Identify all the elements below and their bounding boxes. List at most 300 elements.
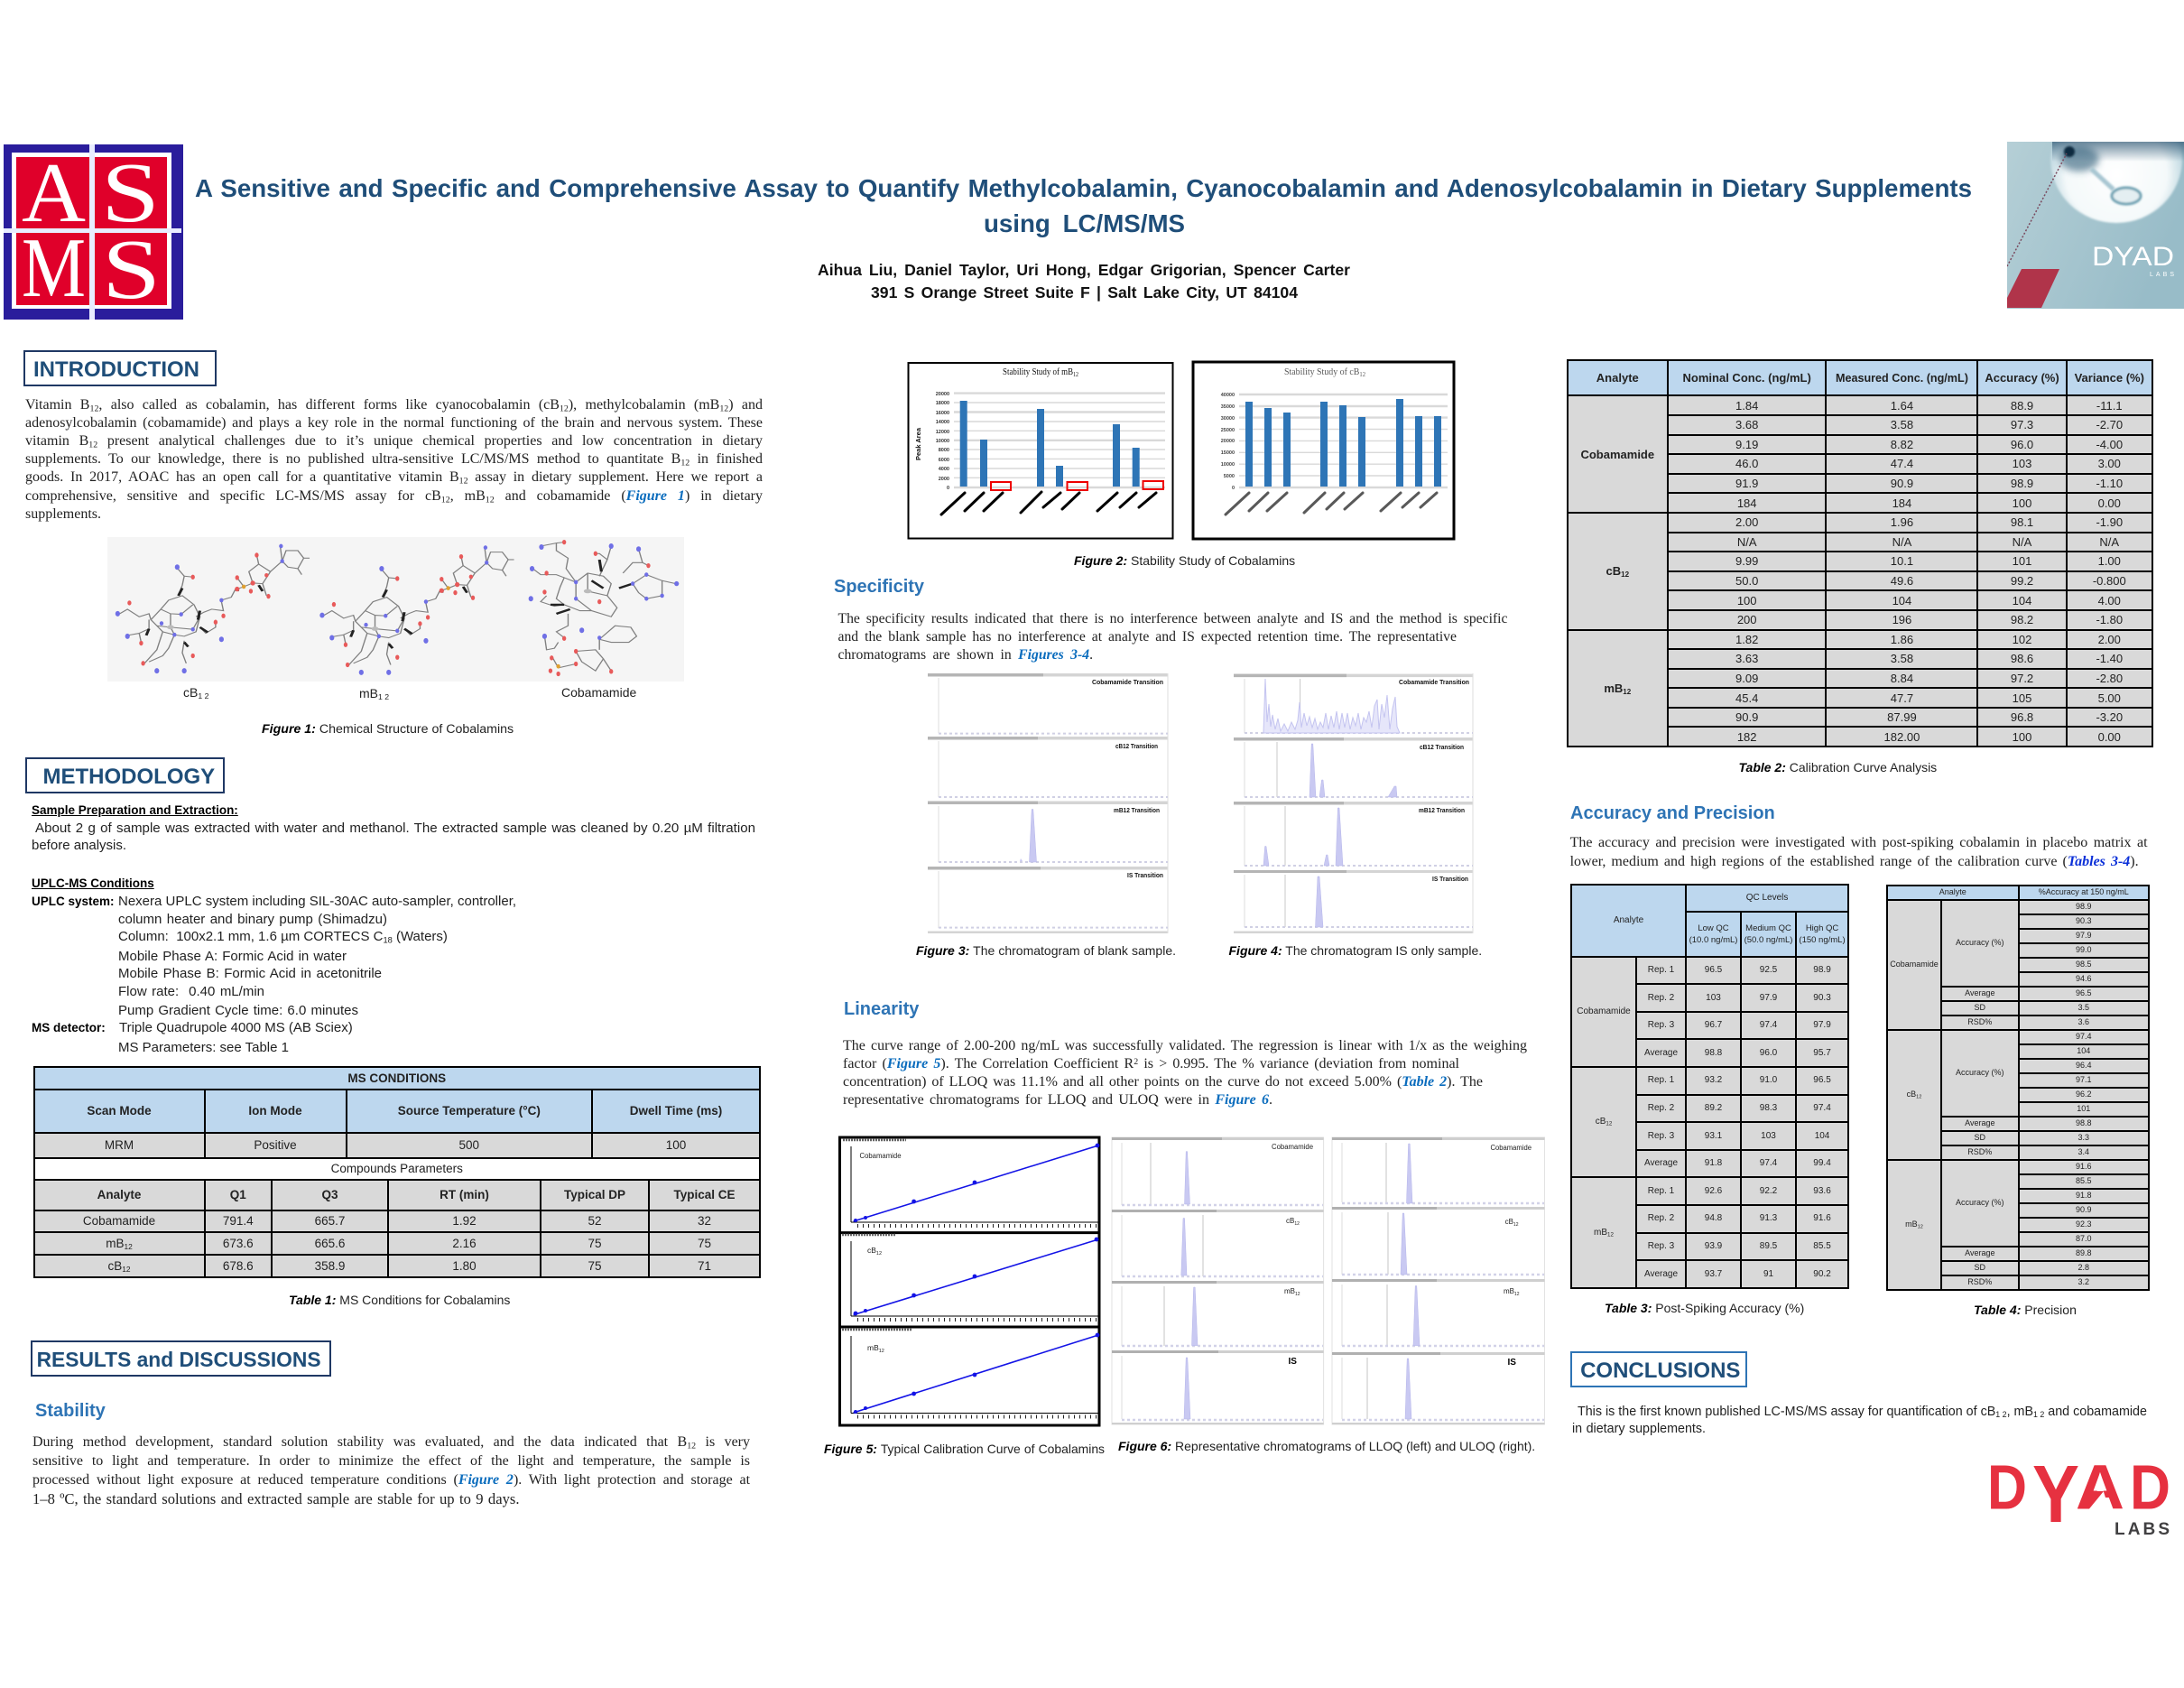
table 4: precision: Accuracy (%) bbox=[1956, 1068, 2004, 1077]
text: conclusions paragraph: This is the first known published LC-MS/MS assay for quantification of cB1 2, mB1 2 and cobamamide bbox=[1578, 1405, 2147, 1419]
table 2: calibration curve analysis: 104 bbox=[2013, 594, 2031, 607]
figure 6: chromatograms of LLOQ and ULOQ: Cobamamide bbox=[1272, 1143, 1314, 1151]
table 4: precision: mB12 bbox=[1905, 1220, 1923, 1229]
table 2: calibration curve analysis: 100 bbox=[2013, 496, 2031, 510]
table 2: calibration curve analysis: N/A bbox=[1737, 535, 1757, 549]
table 4: precision: SD bbox=[1975, 1263, 1985, 1272]
table 2: calibration curve analysis: cB12 bbox=[1606, 564, 1629, 579]
subheading: specificity: Specificity bbox=[834, 576, 924, 596]
figure 3: chromatograms of blank sample bbox=[928, 673, 1168, 933]
table 2: calibration curve analysis: 9.99 bbox=[1735, 554, 1758, 568]
chart: stability study of mB12: 10000 bbox=[936, 439, 949, 444]
table 1: MS conditions bbox=[33, 1066, 761, 1278]
table 3: post-spiking accuracy: Average bbox=[1644, 1158, 1678, 1168]
table 2: calibration curve analysis: 0.00 bbox=[2098, 496, 2121, 510]
text: accuracy and precision paragraph: The accuracy and precision were investigated with post-spiking cobalamin in placebo matrix at bbox=[1570, 835, 2148, 850]
table 2: calibration curve analysis: 101 bbox=[2013, 554, 2031, 568]
table 4: precision: 3.5 bbox=[2078, 1003, 2089, 1012]
table 1: MS conditions: MRM bbox=[105, 1138, 134, 1152]
table 2: calibration curve analysis: Cobamamide bbox=[1580, 448, 1654, 461]
table 3: post-spiking accuracy: Rep. 3 bbox=[1648, 1020, 1674, 1030]
table 3: post-spiking accuracy: 85.5 bbox=[1813, 1241, 1831, 1251]
table 3: post-spiking accuracy: Average bbox=[1644, 1048, 1678, 1058]
table 1: MS conditions: 1.80 bbox=[452, 1259, 477, 1273]
table 2: calibration curve analysis: N/A bbox=[1892, 535, 1911, 549]
figure 4: chromatograms of IS only sample bbox=[1234, 673, 1473, 933]
table 2: calibration curve analysis: -1.40 bbox=[2096, 652, 2123, 665]
table 4: precision: 104 bbox=[2077, 1046, 2090, 1055]
figure 6: chromatograms of LLOQ and ULOQ: mB bbox=[1504, 1287, 1514, 1295]
table 1: MS conditions: 100 bbox=[666, 1138, 686, 1152]
table 2: calibration curve analysis: 103 bbox=[2013, 457, 2031, 470]
table 1: MS conditions: Positive bbox=[254, 1138, 297, 1152]
chart: stability study of mB12: 2000 bbox=[939, 477, 949, 482]
table 1: MS conditions: Cobamamide bbox=[83, 1214, 155, 1228]
table 1: MS conditions: Analyte bbox=[97, 1188, 141, 1201]
figure 3: chromatograms of blank sample: IS Transition bbox=[1127, 871, 1163, 879]
caption: table 2: Table 2: Calibration Curve Analysis bbox=[1738, 760, 1937, 774]
figure 6: chromatograms of LLOQ and ULOQ: IS bbox=[1507, 1358, 1516, 1368]
table 3: post-spiking accuracy: 97.4 bbox=[1760, 1158, 1777, 1168]
table 2: calibration curve analysis: 3.68 bbox=[1735, 418, 1758, 431]
heading: conclusions: CONCLUSIONS bbox=[1580, 1359, 1740, 1383]
figure 5: calibration curves bbox=[838, 1136, 1101, 1426]
authors and address bbox=[818, 261, 1350, 301]
table 4: precision: 96.2 bbox=[2076, 1090, 2092, 1099]
chart: stability study of cB12: 30000 bbox=[1221, 416, 1235, 422]
heading: introduction: INTRODUCTION bbox=[33, 357, 199, 382]
table 2: calibration curve analysis: 3.58 bbox=[1891, 652, 1913, 665]
table 4: precision: 3.2 bbox=[2078, 1277, 2089, 1286]
table 2: calibration curve analysis: 50.0 bbox=[1735, 574, 1758, 588]
chart: stability study of mB12: 14000 bbox=[936, 420, 949, 425]
table 2: calibration curve analysis: 1.82 bbox=[1735, 633, 1758, 646]
label: Cobamamide: Cobamamide bbox=[561, 685, 636, 700]
subheading: sample preparation: Sample Preparation and Extraction: bbox=[32, 803, 238, 816]
chart: stability study of mB12: Stability Study of mB bbox=[1003, 367, 1086, 377]
table 4: precision: 90.9 bbox=[2076, 1205, 2092, 1214]
text block: sample preparation and UPLC-MS conditions: Mobile Phase A: Formic Acid in water bbox=[118, 949, 347, 964]
table 3: post-spiking accuracy: Low QC bbox=[1698, 923, 1729, 933]
table 2: calibration curve analysis: Measured Conc. (ng/mL) bbox=[1836, 372, 1968, 385]
table 2: calibration curve analysis: Variance (%) bbox=[2075, 371, 2144, 385]
table 3: post-spiking accuracy: 92.5 bbox=[1760, 965, 1777, 975]
image: DYAD Labs cover: DYAD bbox=[2092, 242, 2174, 272]
table 1: MS conditions: 665.7 bbox=[315, 1214, 345, 1228]
table 4: precision: Average bbox=[1965, 988, 1994, 997]
table 4: precision: 98.5 bbox=[2076, 960, 2092, 969]
table 2: calibration curve analysis: -0.800 bbox=[2093, 574, 2126, 588]
text: specificity paragraph bbox=[838, 610, 1507, 663]
table 1: MS conditions: 75 bbox=[588, 1237, 601, 1250]
table 2: calibration curve analysis: 1.00 bbox=[2098, 554, 2121, 568]
table 1: MS conditions: 32 bbox=[698, 1214, 711, 1228]
table 4: precision: %Accuracy at 150 ng/mL bbox=[2039, 887, 2129, 896]
table 3: post-spiking accuracy: 97.4 bbox=[1760, 1020, 1777, 1030]
text: introduction paragraph: Vitamin B12, also called as cobalamin, has different forms like cyanocobalamin (cB12), methylcobalamin (mB12) and bbox=[25, 397, 763, 413]
text: linearity paragraph: representative chromatograms for LLOQ and ULOQ were in Figure 6. bbox=[843, 1092, 1272, 1108]
figure 5: calibration curves: 12 bbox=[876, 1251, 882, 1257]
table 3: post-spiking accuracy bbox=[1570, 884, 1849, 1289]
text: introduction paragraph: vitamin B12 present analytical challenges due to it’s unique chemical properties and low concentration in dietary bbox=[25, 433, 763, 450]
table 2: calibration curve analysis: 96.8 bbox=[2011, 710, 2033, 724]
chart: stability study of cB12: 40000 bbox=[1221, 393, 1235, 398]
title: A Sensitive and Specific and Comprehensive Assay to Quantify Methylcobalamin, Cyanocobalamin and Adenosylcobalamin in Dietary Supplements bbox=[195, 174, 1972, 202]
table 1: MS conditions: 52 bbox=[588, 1214, 601, 1228]
table 2: calibration curve analysis: 0.00 bbox=[2098, 730, 2121, 744]
table 3: post-spiking accuracy: 97.9 bbox=[1760, 993, 1777, 1003]
table 4: precision: 91.6 bbox=[2076, 1162, 2092, 1171]
text: linearity paragraph: The curve range of 2.00-200 ng/mL was successfully validated. The regression is linear with 1/x as the weighing bbox=[843, 1038, 1527, 1053]
table 2: calibration curve analysis: 100 bbox=[2013, 730, 2031, 744]
table 2: calibration curve analysis: 200 bbox=[1737, 613, 1757, 626]
table 2: calibration curve analysis: 99.2 bbox=[2011, 574, 2033, 588]
table 3: post-spiking accuracy: Average bbox=[1644, 1269, 1678, 1279]
text: stability paragraph: 1–8 ºC, the standard solutions and extracted sample are stable for up to 9 days. bbox=[32, 1490, 520, 1507]
table 3: post-spiking accuracy: 98.8 bbox=[1705, 1048, 1722, 1058]
table 3: post-spiking accuracy: 92.2 bbox=[1760, 1186, 1777, 1196]
table 4: precision: SD bbox=[1975, 1003, 1985, 1012]
table 4: precision: 97.4 bbox=[2076, 1032, 2092, 1041]
table 4: precision: 97.9 bbox=[2076, 931, 2092, 940]
table 4: precision: Average bbox=[1965, 1118, 1994, 1127]
table 2: calibration curve analysis: 2.00 bbox=[2098, 633, 2121, 646]
text: stability paragraph: processed without light exposure at reduced temperature conditions (Figure 2). With light protection and storage at bbox=[32, 1472, 750, 1488]
chart: stability study of cB12: 12 bbox=[1359, 371, 1365, 378]
title bbox=[195, 174, 1972, 237]
table 3: post-spiking accuracy: (50.0 ng/mL) bbox=[1744, 935, 1792, 945]
table 2: calibration curve analysis: mB12 bbox=[1604, 682, 1631, 696]
label: cB12: cB1 2 bbox=[183, 685, 208, 700]
table 2: calibration curve analysis: 46.0 bbox=[1735, 457, 1758, 470]
table 3: post-spiking accuracy: 93.6 bbox=[1813, 1186, 1831, 1196]
logo: ASMS: A bbox=[22, 146, 86, 240]
subheading: linearity: Linearity bbox=[844, 999, 919, 1019]
table 3: post-spiking accuracy: Rep. 2 bbox=[1648, 1103, 1674, 1113]
figure 3: chromatograms of blank sample: mB12 Transition bbox=[1114, 806, 1160, 814]
table 4: precision: cB12 bbox=[1907, 1090, 1921, 1099]
text block: sample preparation and UPLC-MS conditions bbox=[32, 803, 755, 1055]
chart: stability study of mB12: 18000 bbox=[936, 401, 949, 406]
table 4: precision: 89.8 bbox=[2076, 1248, 2092, 1257]
title: using LC/MS/MS bbox=[984, 209, 1185, 237]
text: stability paragraph bbox=[32, 1434, 750, 1507]
table 1: MS conditions: 2.16 bbox=[452, 1237, 477, 1250]
subheading: stability: Stability bbox=[35, 1401, 106, 1421]
table 3: post-spiking accuracy: 98.9 bbox=[1813, 965, 1831, 975]
table 2: calibration curve analysis: -1.10 bbox=[2096, 477, 2123, 490]
figure 6: chromatograms of LLOQ and ULOQ: mB bbox=[1284, 1287, 1295, 1295]
authors and address: Aihua Liu, Daniel Taylor, Uri Hong, Edgar Grigorian, Spencer Carter bbox=[818, 261, 1350, 279]
table 2: calibration curve analysis: 100 bbox=[1737, 594, 1757, 607]
table 3: post-spiking accuracy: 93.2 bbox=[1705, 1075, 1722, 1085]
table 3: post-spiking accuracy: 93.9 bbox=[1705, 1241, 1722, 1251]
figure 5: calibration curves: cB bbox=[867, 1246, 876, 1255]
table 2: calibration curve analysis: 90.9 bbox=[1735, 710, 1758, 724]
table 2: calibration curve analysis: 105 bbox=[2013, 691, 2031, 705]
table 1: MS conditions: 673.6 bbox=[223, 1237, 254, 1250]
label: UPLC system: UPLC system: bbox=[32, 894, 115, 908]
table 2: calibration curve analysis: 196 bbox=[1892, 613, 1911, 626]
figure 3: chromatograms of blank sample: Cobamamide Transition bbox=[1092, 678, 1163, 686]
table 3: post-spiking accuracy: 90.2 bbox=[1813, 1269, 1831, 1279]
table 1: MS conditions: 71 bbox=[698, 1259, 711, 1273]
table 2: calibration curve analysis: 97.3 bbox=[2011, 418, 2033, 431]
figure 6: chromatograms of LLOQ and ULOQ: cB bbox=[1505, 1218, 1513, 1226]
table 2: calibration curve analysis: 3.00 bbox=[2098, 457, 2121, 470]
text block: sample preparation and UPLC-MS conditions: Nexera UPLC system including SIL-30AC auto-sampler, controller, bbox=[118, 894, 516, 908]
table 2: calibration curve analysis: 96.0 bbox=[2011, 438, 2033, 451]
logo: ASMS: S bbox=[101, 146, 160, 240]
authors and address: 391 S Orange Street Suite F | Salt Lake City, UT 84104 bbox=[871, 283, 1298, 301]
table 4: precision: 3.6 bbox=[2078, 1017, 2089, 1026]
chart: stability study of mB12: 4000 bbox=[939, 467, 949, 472]
table 3: post-spiking accuracy: (150 ng/mL) bbox=[1799, 935, 1846, 945]
chart: stability study of mB12: Peak Area bbox=[914, 427, 922, 460]
table 2: calibration curve analysis: 182 bbox=[1737, 730, 1757, 744]
table 4: precision: 92.3 bbox=[2076, 1220, 2092, 1229]
table 2: calibration curve analysis: 10.1 bbox=[1891, 554, 1913, 568]
image: DYAD Labs cover bbox=[2007, 142, 2184, 309]
chart: stability study of mB12: 0 bbox=[947, 486, 949, 491]
chart: stability study of mB12 bbox=[908, 362, 1173, 540]
table 4: precision: Cobamamide bbox=[1890, 960, 1939, 969]
table 2: calibration curve analysis: 87.99 bbox=[1887, 710, 1917, 724]
table 2: calibration curve analysis: 98.6 bbox=[2011, 652, 2033, 665]
table 2: calibration curve analysis: 9.09 bbox=[1735, 672, 1758, 685]
table 2: calibration curve analysis: 1.86 bbox=[1891, 633, 1913, 646]
table 3: post-spiking accuracy: Rep. 3 bbox=[1648, 1241, 1674, 1251]
figure 6: chromatograms of LLOQ and ULOQ: 12 bbox=[1295, 1292, 1300, 1297]
text block: sample preparation and UPLC-MS conditions: before analysis. bbox=[32, 838, 126, 853]
table 2: calibration curve analysis: 4.00 bbox=[2098, 594, 2121, 607]
table 4: precision: 2.8 bbox=[2078, 1263, 2089, 1272]
table 3: post-spiking accuracy: Medium QC bbox=[1745, 923, 1791, 933]
table 2: calibration curve analysis: Analyte bbox=[1596, 371, 1639, 385]
table 3: post-spiking accuracy: 97.4 bbox=[1813, 1103, 1831, 1113]
figure 6: chromatograms of LLOQ and ULOQ: Cobamamide bbox=[1491, 1144, 1532, 1152]
heading: results and discussions bbox=[31, 1340, 331, 1377]
figure 5: calibration curves: Cobamamide bbox=[859, 1151, 902, 1160]
table 2: calibration curve analysis: 184 bbox=[1892, 496, 1911, 510]
text: linearity paragraph bbox=[843, 1038, 1527, 1108]
chart: stability study of cB12: 0 bbox=[1232, 486, 1235, 491]
text: introduction paragraph: goods. In 2017, AOAC has an open call for a quantitative vitamin B12 assay in dietary supplement. Here we report a bbox=[25, 469, 763, 487]
chart: stability study of mB12: 16000 bbox=[936, 411, 949, 416]
table 2: calibration curve analysis: 97.2 bbox=[2011, 672, 2033, 685]
table 2: calibration curve analysis: 1.96 bbox=[1891, 515, 1913, 529]
table 3: post-spiking accuracy: 95.7 bbox=[1813, 1048, 1831, 1058]
caption: table 4: Table 4: Precision bbox=[1974, 1303, 2077, 1317]
chart: stability study of cB12: 10000 bbox=[1221, 462, 1235, 468]
table 3: post-spiking accuracy: Rep. 1 bbox=[1648, 1075, 1674, 1085]
text: accuracy and precision paragraph bbox=[1570, 835, 2148, 869]
table 3: post-spiking accuracy: Rep. 3 bbox=[1648, 1131, 1674, 1141]
table 4: precision: RSD% bbox=[1967, 1017, 1992, 1026]
table 4: precision: 98.9 bbox=[2076, 902, 2092, 911]
image: DYAD Labs cover: LABS bbox=[2150, 272, 2174, 278]
logo: ASMS: M bbox=[22, 221, 86, 315]
figure 5: calibration curves: mB bbox=[867, 1343, 879, 1352]
figure 4: chromatograms of IS only sample: cB12 Transition bbox=[1420, 743, 1464, 751]
table 4: precision: 85.5 bbox=[2076, 1176, 2092, 1185]
table 2: calibration curve analysis: -11.1 bbox=[2096, 399, 2123, 413]
table 4: precision: 87.0 bbox=[2076, 1234, 2092, 1243]
text: stability paragraph: During method development, standard solution stability was evaluated, and the data indicated that B12 is very bbox=[32, 1434, 750, 1451]
text: conclusions paragraph bbox=[1572, 1405, 2147, 1436]
caption: figure 3: Figure 3: The chromatogram of blank sample. bbox=[916, 943, 1176, 958]
chart: stability study of mB12: 12000 bbox=[936, 430, 949, 435]
text block: sample preparation and UPLC-MS conditions: Flow rate: 0.40 mL/min bbox=[118, 984, 264, 999]
text: linearity paragraph: concentration) of LLOQ was 11.1% and all other points on the curve do not exceed 5.00% (Table 2). The bbox=[843, 1074, 1483, 1090]
table 2: calibration curve analysis: 3.58 bbox=[1891, 418, 1913, 431]
table 3: post-spiking accuracy: 91.3 bbox=[1760, 1213, 1777, 1223]
table 3: post-spiking accuracy: Rep. 2 bbox=[1648, 993, 1674, 1003]
table 2: calibration curve analysis: Nominal Conc. (ng/mL) bbox=[1683, 371, 1811, 385]
table 2: calibration curve analysis: 1.84 bbox=[1735, 399, 1758, 413]
label: mB12: mB1 2 bbox=[359, 686, 389, 701]
table 1: MS conditions: Source Temperature (°C) bbox=[398, 1104, 541, 1118]
figure 4: chromatograms of IS only sample: IS Transition bbox=[1432, 875, 1468, 883]
text: linearity paragraph: factor (Figure 5). The Correlation Coefficient R2 is > 0.995. The % variance (deviation from nominal bbox=[843, 1056, 1459, 1071]
heading: introduction bbox=[23, 350, 217, 386]
table 2: calibration curve analysis: N/A bbox=[2099, 535, 2119, 549]
table 1: MS conditions: Typical DP bbox=[564, 1188, 625, 1201]
table 2: calibration curve analysis: 1.64 bbox=[1891, 399, 1913, 413]
table 4: precision: 3.4 bbox=[2078, 1147, 2089, 1156]
table 4: precision: Accuracy (%) bbox=[1956, 938, 2004, 947]
table 2: calibration curve analysis: -1.90 bbox=[2096, 515, 2123, 529]
table 3: post-spiking accuracy: 98.3 bbox=[1760, 1103, 1777, 1113]
table 3: post-spiking accuracy: 91 bbox=[1763, 1269, 1773, 1279]
chart: stability study of cB12: Stability Study of cB bbox=[1284, 367, 1364, 377]
figure 4: chromatograms of IS only sample: mB12 Transition bbox=[1419, 806, 1465, 814]
table 2: calibration curve analysis: -4.00 bbox=[2096, 438, 2123, 451]
table 3: post-spiking accuracy: (10.0 ng/mL) bbox=[1689, 935, 1737, 945]
table 3: post-spiking accuracy: 90.3 bbox=[1813, 993, 1831, 1003]
table 1: MS conditions: 75 bbox=[588, 1259, 601, 1273]
table 4: precision: 91.8 bbox=[2076, 1191, 2092, 1200]
caption: figure 1: Figure 1: Chemical Structure of Cobalamins bbox=[262, 722, 514, 737]
figure 6: chromatograms of LLOQ and ULOQ: IS bbox=[1289, 1357, 1297, 1367]
table 3: post-spiking accuracy: 89.5 bbox=[1760, 1241, 1777, 1251]
table 3: post-spiking accuracy: Cobamamide bbox=[1577, 1006, 1631, 1016]
table 2: calibration curve analysis: 8.82 bbox=[1891, 438, 1913, 451]
table 2: calibration curve analysis: Accuracy (%) bbox=[1985, 371, 2059, 385]
table 2: calibration curve analysis: 47.4 bbox=[1891, 457, 1913, 470]
table 3: post-spiking accuracy: 96.7 bbox=[1705, 1020, 1722, 1030]
figure 6: chromatograms of LLOQ and ULOQ: 12 bbox=[1294, 1221, 1300, 1227]
table 3: post-spiking accuracy: 89.2 bbox=[1705, 1103, 1722, 1113]
table 3: post-spiking accuracy: 103 bbox=[1761, 1131, 1776, 1141]
table 1: MS conditions: 75 bbox=[698, 1237, 711, 1250]
table 2: calibration curve analysis: -1.80 bbox=[2096, 613, 2123, 626]
table 1: MS conditions: Ion Mode bbox=[248, 1104, 302, 1118]
table 2: calibration curve analysis: 9.19 bbox=[1735, 438, 1758, 451]
chart: stability study of mB12: 6000 bbox=[939, 458, 949, 463]
table 4: precision: RSD% bbox=[1967, 1147, 1992, 1156]
figure 6: chromatograms of LLOQ and ULOQ bbox=[1112, 1137, 1545, 1424]
table 4: precision: 99.0 bbox=[2076, 945, 2092, 954]
table 2: calibration curve analysis: -3.20 bbox=[2096, 710, 2123, 724]
table 3: post-spiking accuracy: 99.4 bbox=[1813, 1158, 1831, 1168]
text block: sample preparation and UPLC-MS conditions: Mobile Phase B: Formic Acid in acetonitrile bbox=[118, 966, 382, 981]
table 2: calibration curve analysis: 104 bbox=[1892, 594, 1911, 607]
table 2: calibration curve analysis bbox=[1567, 359, 2153, 747]
chart: stability study of mB12: 12 bbox=[1073, 371, 1078, 378]
table 2: calibration curve analysis: 91.9 bbox=[1735, 477, 1758, 490]
table 2: calibration curve analysis: 2.00 bbox=[1735, 515, 1758, 529]
logo: DYAD Labs bbox=[1987, 1455, 2170, 1538]
text: specificity paragraph: and the blank sample has no interference at analyte and IS expected retention time. The representative bbox=[838, 629, 1457, 645]
table 2: calibration curve analysis: N/A bbox=[2013, 535, 2031, 549]
text: introduction paragraph: comprehensive, sensitive and specific LC-MS/MS assay for cB12, mB12 and cobamamide (Figure 1) in dietary bbox=[25, 488, 763, 505]
chart: stability study of cB12: 5000 bbox=[1224, 474, 1235, 479]
text: introduction paragraph bbox=[25, 397, 763, 522]
table 1: MS conditions: Scan Mode bbox=[87, 1104, 152, 1118]
table 2: calibration curve analysis: 45.4 bbox=[1735, 691, 1758, 705]
table 3: post-spiking accuracy: 93.1 bbox=[1705, 1131, 1722, 1141]
table 1: MS conditions: 678.6 bbox=[223, 1259, 254, 1273]
table 2: calibration curve analysis: 98.2 bbox=[2011, 613, 2033, 626]
text block: sample preparation and UPLC-MS conditions: Triple Quadrupole 4000 MS (AB Sciex) bbox=[119, 1020, 353, 1035]
heading: conclusions bbox=[1570, 1351, 1747, 1387]
table 3: post-spiking accuracy: 97.9 bbox=[1813, 1020, 1831, 1030]
table 4: precision: Accuracy (%) bbox=[1956, 1198, 2004, 1207]
table 1: MS conditions: mB12 bbox=[106, 1237, 133, 1251]
table 2: calibration curve analysis: 102 bbox=[2013, 633, 2031, 646]
figure 3: chromatograms of blank sample: cB12 Transition bbox=[1115, 742, 1158, 750]
table 2: calibration curve analysis: 47.7 bbox=[1891, 691, 1913, 705]
table 2: calibration curve analysis: 98.1 bbox=[2011, 515, 2033, 529]
heading: results and discussions: RESULTS and DISCUSSIONS bbox=[37, 1348, 321, 1371]
table 1: MS conditions: cB12 bbox=[107, 1259, 131, 1274]
table 3: post-spiking accuracy: High QC bbox=[1806, 923, 1838, 933]
table 4: precision: 94.6 bbox=[2076, 974, 2092, 983]
table 3: post-spiking accuracy: Rep. 1 bbox=[1648, 965, 1674, 975]
table 4: precision: 98.8 bbox=[2076, 1118, 2092, 1127]
table 2: calibration curve analysis: 5.00 bbox=[2098, 691, 2121, 705]
table 1: MS conditions: Q1 bbox=[230, 1188, 246, 1201]
figure 6: chromatograms of LLOQ and ULOQ: 12 bbox=[1513, 1222, 1519, 1228]
table 2: calibration curve analysis: 3.63 bbox=[1735, 652, 1758, 665]
subheading: UPLC-MS conditions: UPLC-MS Conditions bbox=[32, 876, 154, 890]
chart: stability study of cB12: 20000 bbox=[1221, 439, 1235, 444]
text block: sample preparation and UPLC-MS conditions: MS Parameters: see Table 1 bbox=[118, 1040, 289, 1055]
table 3: post-spiking accuracy: 104 bbox=[1815, 1131, 1829, 1141]
table 3: post-spiking accuracy: 96.5 bbox=[1813, 1075, 1831, 1085]
table 1: MS conditions: Q3 bbox=[321, 1188, 338, 1201]
table 2: calibration curve analysis: 184 bbox=[1737, 496, 1757, 510]
chart: stability study of mB12: 20000 bbox=[936, 392, 949, 397]
table 3: post-spiking accuracy: cB12 bbox=[1596, 1117, 1612, 1127]
chart: stability study of cB12 bbox=[1191, 361, 1455, 540]
table 3: post-spiking accuracy: 91.6 bbox=[1813, 1213, 1831, 1223]
text: introduction paragraph: supplements. To our knowledge, there is no published ultra-sensitive LC/MS/MS method to quantitate B12 in finished bbox=[25, 451, 763, 468]
table 1: MS conditions: 500 bbox=[459, 1138, 479, 1152]
caption: table 3: Table 3: Post-Spiking Accuracy (%) bbox=[1605, 1301, 1804, 1315]
table 4: precision bbox=[1886, 885, 2150, 1291]
figure 5: calibration curves: 12 bbox=[879, 1349, 884, 1354]
table 3: post-spiking accuracy: Rep. 2 bbox=[1648, 1213, 1674, 1223]
table 4: precision: Analyte bbox=[1939, 887, 1967, 896]
table 4: precision: 90.3 bbox=[2076, 916, 2092, 925]
caption: figure 4: Figure 4: The chromatogram IS only sample. bbox=[1229, 943, 1482, 958]
chart: stability study of cB12: 15000 bbox=[1221, 450, 1235, 456]
table 1: MS conditions: MS CONDITIONS bbox=[347, 1071, 446, 1085]
table 4: precision: 96.5 bbox=[2076, 988, 2092, 997]
logo: ASMS bbox=[4, 144, 183, 320]
